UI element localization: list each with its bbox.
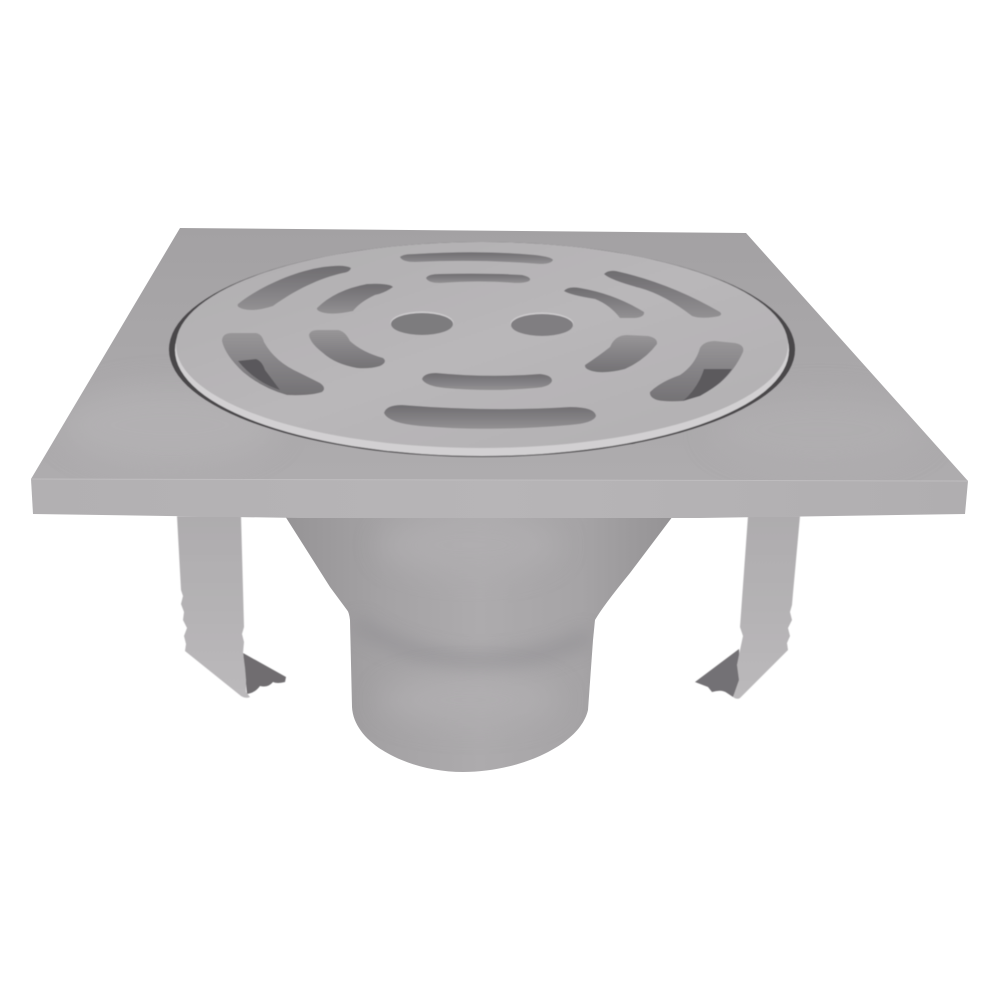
right lower slots — [585, 335, 743, 401]
left leg strip — [177, 516, 250, 698]
right foot tab — [695, 649, 741, 697]
recess shadow ring — [169, 242, 795, 457]
product photo: floor drain — [31, 228, 968, 772]
left lower slots — [222, 330, 385, 395]
body base shape — [280, 510, 680, 780]
grate rim — [175, 244, 789, 456]
drain body: cone and outlet pipe — [280, 510, 680, 780]
right mounting leg — [695, 516, 800, 699]
grate face — [176, 242, 788, 448]
square flange — [31, 228, 968, 518]
right upper slots — [564, 271, 721, 318]
upper centre slots — [400, 252, 553, 283]
lower centre slots — [384, 373, 596, 429]
centre holes — [390, 312, 574, 336]
flange front edge — [31, 479, 968, 518]
flange top face — [31, 228, 968, 481]
round grate — [169, 242, 795, 457]
left mounting leg — [177, 516, 286, 698]
left upper slots — [238, 266, 393, 314]
left foot tab — [243, 653, 286, 694]
right leg strip — [733, 516, 800, 699]
